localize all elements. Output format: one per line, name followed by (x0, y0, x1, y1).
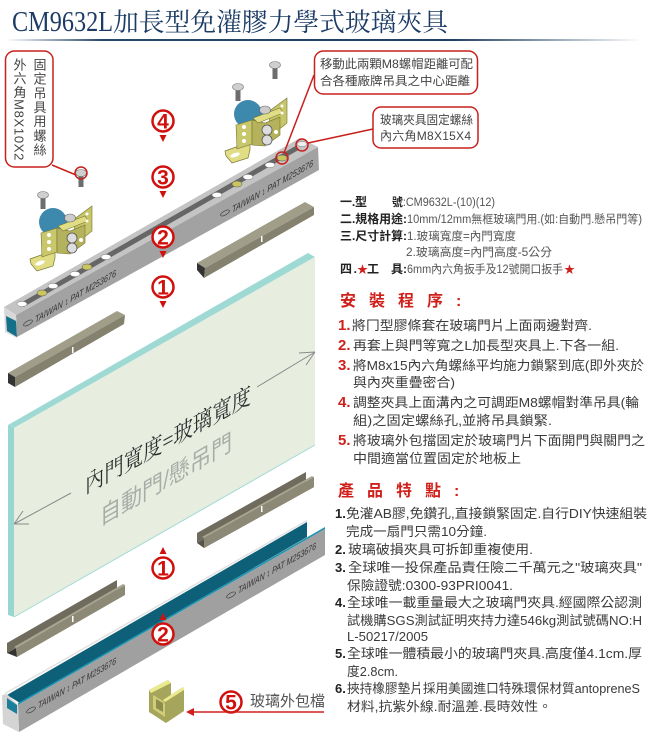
step marker 2 upper: 2 (157, 226, 169, 250)
top aluminium rail: TAIWAN ↕ PAT M253676 (232, 158, 313, 216)
heading: installation steps: 安裝程序: (340, 291, 474, 310)
product features list: 度2.8cm. (347, 664, 398, 679)
specification list: 二.規格用途: (340, 211, 407, 226)
icon: screw 3 (38, 192, 48, 209)
step marker 1 upper: 1 (157, 276, 169, 300)
specification list (340, 195, 642, 276)
callout: adjustable M8 bolts (276, 51, 478, 164)
product features list: 5. (335, 646, 346, 661)
icon: screw 1 (232, 84, 244, 101)
icon: hanger right (225, 98, 287, 163)
icon: screw 2 (270, 62, 280, 79)
product features list: 6. (335, 681, 346, 696)
installation steps list: 將冂型膠條套在玻璃門片上面兩邊對齊. (352, 318, 592, 333)
specification list: 2.玻璃高度=內門高度-5公分 (406, 245, 553, 259)
icon: screw 4 (76, 170, 86, 187)
installation steps list (338, 317, 645, 466)
installation steps list: 中間適當位置固定於地板上 (353, 451, 521, 466)
bottom aluminium rail (2, 520, 325, 732)
product features list: 3. (335, 560, 346, 575)
installation steps list: 與內夾重疊密合) (353, 375, 455, 390)
specification list: 6mm內六角扳手及12號開口扳手 (407, 262, 563, 276)
top aluminium rail (4, 138, 319, 338)
heading: product features: 產品特點: (338, 481, 472, 500)
product features list: 1. (335, 506, 346, 521)
step marker 3 (152, 166, 174, 198)
specification list: 三.尺寸計算: (340, 228, 407, 243)
installation steps list: 組)之固定螺絲孔,並將吊具鎖緊. (353, 413, 552, 428)
step marker 4: 4 (157, 110, 169, 134)
installation steps list: 4. (338, 394, 351, 411)
step marker 3: 3 (157, 166, 169, 190)
step marker 5 with stopper label: 玻璃外包檔 (250, 693, 325, 710)
step marker 2 lower (152, 613, 174, 646)
upper right rubber channel (197, 202, 314, 278)
callout: hanger fixing screws (6, 51, 87, 179)
callout: glass clamp screws: 玻璃夾具固定螺絲 (380, 112, 473, 127)
specification list: ★ (357, 264, 368, 276)
callout: adjustable M8 bolts: 合各種廠牌吊具之中心距離 (320, 73, 470, 88)
glass heading text: 內門寬度=玻璃寬度 (85, 381, 251, 500)
installation steps list: 將玻璃外包擋固定於玻璃門片下面開門與關門之 (353, 433, 645, 448)
step marker 1 lower (152, 547, 174, 580)
title (6, 6, 642, 41)
specification list: 四. (340, 262, 357, 276)
installation steps list: 將M8x15內六角螺絲平均施力鎖緊到底(即外夾於 (353, 358, 644, 373)
callout: glass clamp screws (296, 107, 478, 151)
callout: hanger fixing screws: 固定吊具用螺絲 (32, 58, 46, 157)
product features list: 完成一扇門只需10分鐘. (346, 524, 487, 539)
specification list: 工 (367, 262, 379, 276)
callout: adjustable M8 bolts: 移動此兩顆M8螺帽距離可配 (320, 56, 473, 71)
product features list: 全球唯一載重量最大之玻璃門夾具.經國際公認測 (347, 595, 642, 610)
product features list: 玻璃破損夾具可拆卸重複使用. (348, 542, 533, 557)
title: 加長型免灌膠力學式玻璃夾具 (113, 8, 450, 37)
step marker 1 lower: 1 (157, 558, 169, 580)
specification list: 10mm/12mm無框玻璃門用.(如:自動門.懸吊門等) (407, 212, 642, 226)
product features list: 試機購SGS測試証明夾持力達546kg測試號碼NO:H (347, 613, 642, 628)
glass sub text: 自動門/懸吊門 (100, 428, 232, 532)
product features list: 2. (335, 542, 346, 557)
upper left rubber channel (8, 311, 125, 387)
specification list: 一.型 (340, 195, 367, 209)
bottom aluminium rail: TAIWAN ↕ PAT M253676 (38, 656, 116, 712)
callout: glass clamp screws: 內六角M8X15X4 (380, 129, 471, 143)
icon: outer glass stopper block (149, 680, 184, 723)
specification list: 號:CM9632L-(10)(12) (392, 195, 495, 209)
top aluminium rail: TAIWAN ↕ PAT M253676 (35, 268, 116, 326)
installation steps list: 5. (338, 432, 351, 449)
installation steps list: 再套上與門等寬之L加長型夾具上.下各一組. (353, 338, 619, 353)
product features list: 保險證號:0300-93PRI0041. (347, 578, 513, 593)
step marker 5 with stopper label: 5 (225, 692, 237, 714)
glass panel (8, 253, 315, 617)
product features list: 4. (335, 595, 346, 610)
step marker 2 upper (152, 226, 174, 258)
bottom aluminium rail: TAIWAN ↕ PAT M253676 (238, 541, 316, 597)
product features list: 全球唯一體積最小的玻璃門夾具.高度僅4.1cm.厚 (347, 646, 642, 661)
callout: hanger fixing screws: 外六角M8X10X2 (12, 58, 26, 161)
specification list: ★ (564, 264, 575, 276)
installation steps list: 調整夾具上面溝內之可調距M8螺帽對準吊具(輪 (353, 395, 639, 410)
step marker 1 upper (152, 276, 174, 308)
specification list: 具: (391, 262, 407, 276)
title: CM9632L (12, 6, 113, 38)
installation steps list: 1. (338, 317, 351, 334)
product features list: L-50217/2005 (347, 629, 428, 644)
product features list (335, 506, 647, 714)
product features list: 全球唯一投保產品責任險二千萬元之"玻璃夾具" (348, 560, 642, 575)
installation steps list: 2. (338, 337, 351, 354)
step marker 5 with stopper label (186, 692, 325, 716)
step marker 4 (152, 110, 174, 142)
lower right rubber channel (197, 472, 314, 548)
specification list: 1.玻璃寬度=內門寬度 (407, 229, 516, 243)
lower left rubber channel (7, 580, 125, 657)
product features list: 材料,抗紫外線.耐溫差.長時效性。 (347, 699, 552, 714)
installation steps list: 3. (338, 357, 351, 374)
product features list: 挾持橡膠墊片採用美國進口特殊環保材質antopreneS (347, 681, 640, 696)
product features list: 免灌AB膠,免鑽孔,直接鎖緊固定.自行DIY快速組裝 (346, 506, 647, 521)
step marker 2 lower: 2 (157, 624, 169, 646)
icon: hanger left (30, 206, 92, 271)
glass width arrows (14, 352, 315, 524)
